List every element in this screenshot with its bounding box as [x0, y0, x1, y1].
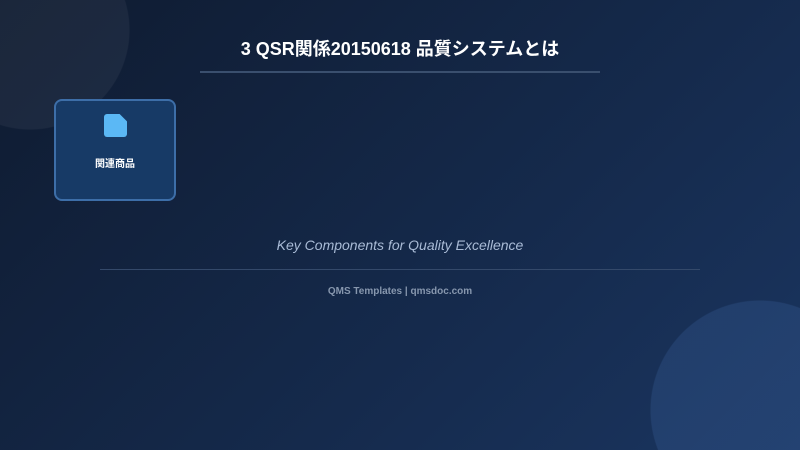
card label: 関連商品 — [95, 159, 135, 170]
subtitle: Key Components for Quality Excellence — [277, 237, 523, 253]
title: 3 QSR関係20150618 品質システムとは — [241, 39, 559, 59]
icon: document — [104, 114, 127, 137]
footer: QMS Templates | qmsdoc.com — [328, 286, 472, 297]
card: 関連商品 — [54, 99, 176, 201]
